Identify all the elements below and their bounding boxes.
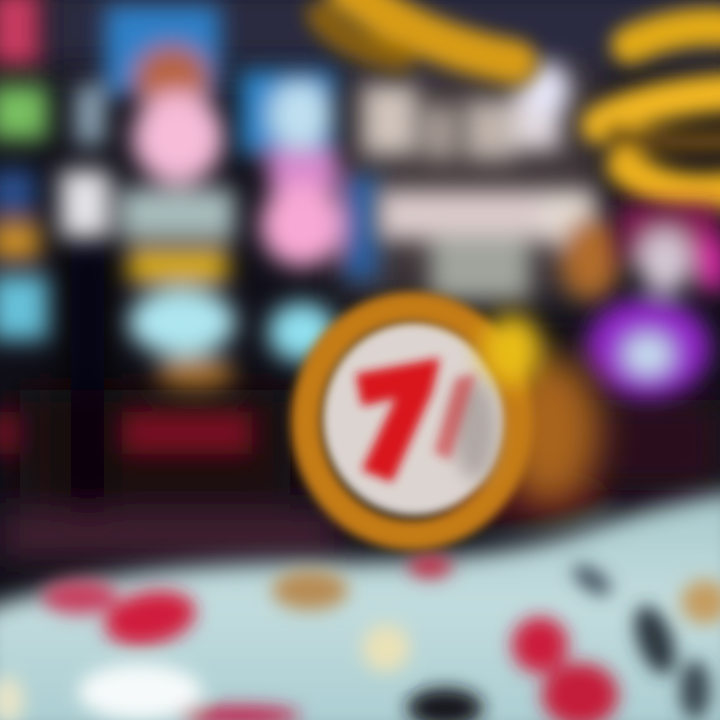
gold ribbons: top right — [320, 0, 720, 192]
gold ring — [306, 307, 518, 535]
ring highlight — [482, 314, 542, 386]
white dial — [321, 320, 509, 516]
red seven — [356, 358, 476, 482]
slot machine: centre — [240, 70, 378, 362]
table: pale blue playing surface — [0, 465, 720, 720]
blurred sign: SLOT lettering — [362, 62, 620, 300]
purple slot character: right — [586, 205, 720, 398]
icon: golden ring with red lucky seven — [306, 307, 600, 535]
ring handle glow — [500, 355, 600, 505]
slot machine: centre left — [60, 5, 252, 454]
dial shading — [453, 380, 497, 480]
slot machine: left edge — [0, 0, 48, 454]
background: upper wall — [0, 0, 720, 555]
table markings: red symbols, chips and dark dice pips — [0, 554, 720, 720]
